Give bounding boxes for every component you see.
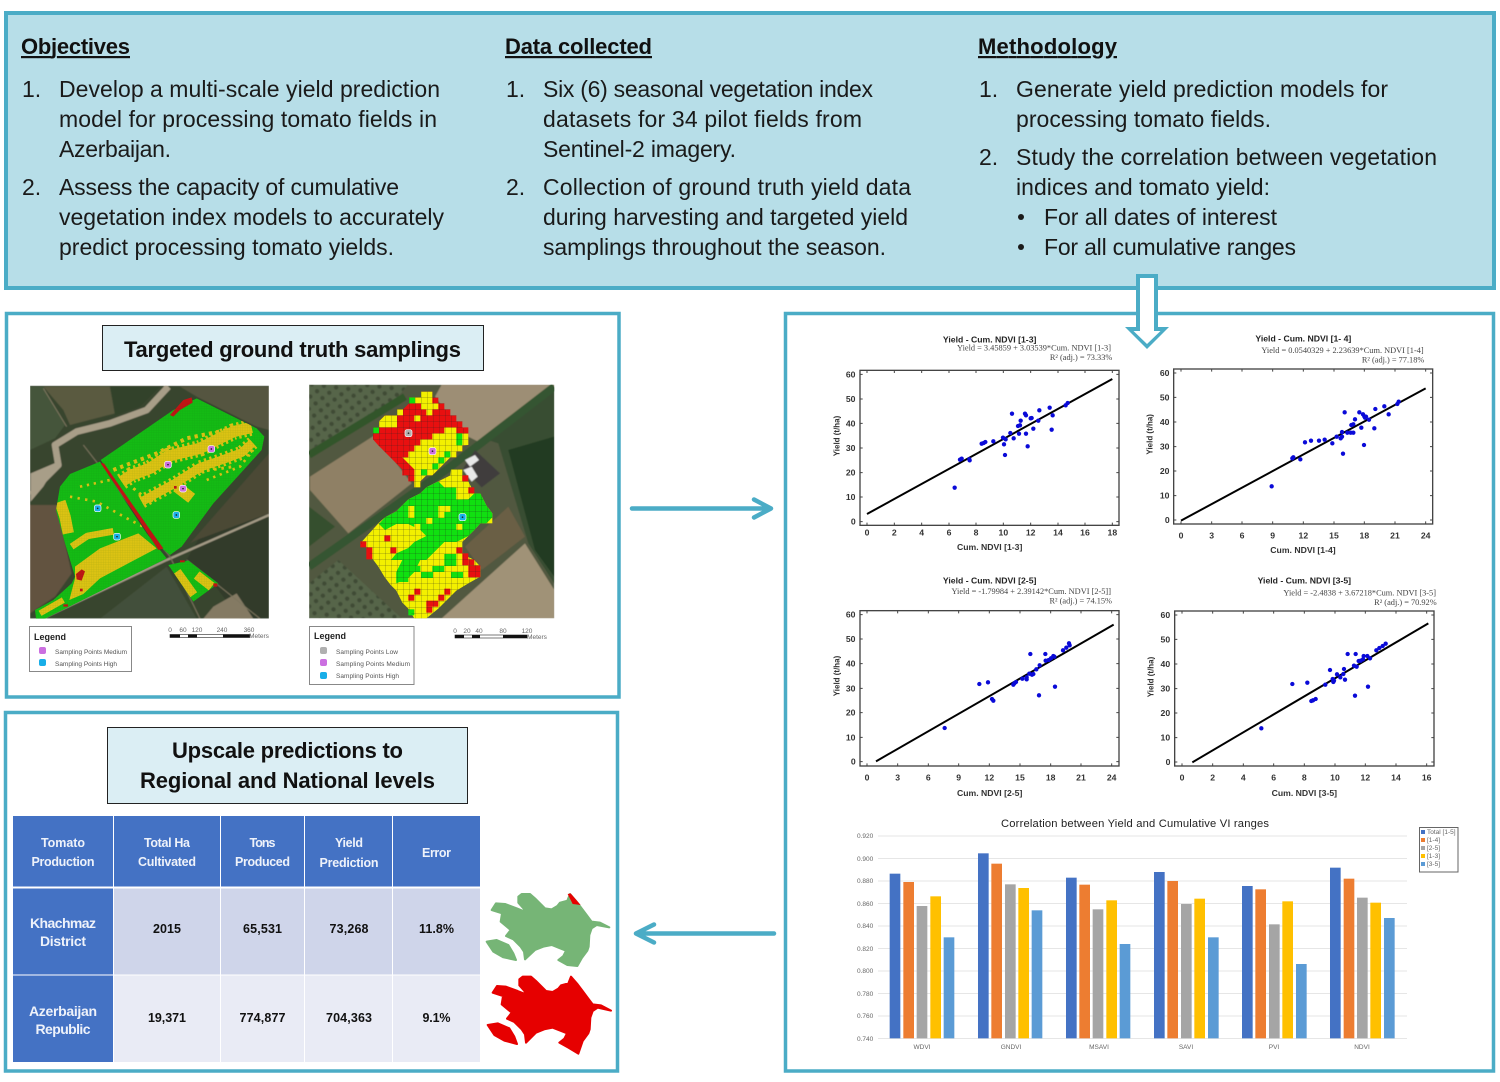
- chart: yield vs cumulative NDVI 2-5: 6: [926, 772, 931, 782]
- lower field cells: [360, 469, 492, 618]
- table: yield predictions: 774,877: [240, 1011, 286, 1025]
- text block: data collected list: Six (6) seasonal vegetation index: [543, 76, 874, 102]
- heading: targeted ground truth samplings: Targeted ground truth samplings: [124, 337, 461, 362]
- chart legend: [1-3]: [1427, 853, 1440, 860]
- chart legend: [3-5]: [1427, 861, 1440, 868]
- chart: yield vs cumulative NDVI 2-5: Yield = -1.79984 + 2.39142*Cum. NDVI [2-5]]: [951, 587, 1111, 596]
- chart: yield vs cumulative NDVI 1-3: Cum. NDVI [1-3]: [957, 542, 1022, 552]
- chart: yield vs cumulative NDVI 1-3: 4: [919, 528, 924, 538]
- chart: yield vs cumulative NDVI 3-5: R² (adj.) = 70.92%: [1374, 598, 1437, 607]
- text block: data collected list: [506, 76, 911, 260]
- chart: correlation between yield and cumulative VI ranges: 0.840: [857, 923, 874, 930]
- chart: yield vs cumulative NDVI 1-3: 20: [846, 468, 856, 478]
- chart: yield vs cumulative NDVI 1-3: 40: [846, 418, 856, 428]
- chart: yield vs cumulative NDVI 1-4: Yield (t/ha): [1146, 414, 1155, 455]
- chart: yield vs cumulative NDVI 3-5: Yield - Cum. NDVI [3-5]: [1258, 575, 1351, 585]
- text block: data collected list: Collection of ground truth yield data: [543, 174, 911, 200]
- small field: [168, 561, 218, 602]
- chart: yield vs cumulative NDVI 1-3: 18: [1108, 528, 1117, 538]
- chart: yield vs cumulative NDVI 1-4: R² (adj.) = 77.18%: [1362, 356, 1424, 365]
- map: pilot fields sampling points: [309, 385, 554, 618]
- scale bar: map 1: 0: [168, 627, 172, 634]
- chart: yield vs cumulative NDVI 3-5: 8: [1302, 772, 1307, 782]
- chart: correlation between yield and cumulative VI ranges: PVI: [1269, 1044, 1279, 1051]
- icon: Azerbaijan map with Khachmaz highlighted: [487, 893, 609, 966]
- panel: targeted ground truth samplings: [6, 314, 619, 697]
- sampling markers: [94, 446, 215, 540]
- chart: correlation between yield and cumulative VI ranges: 0.760: [857, 1013, 874, 1020]
- chart: yield vs cumulative NDVI 3-5: 2: [1210, 772, 1215, 782]
- chart: yield vs cumulative NDVI 1-3: 50: [846, 394, 856, 404]
- table: yield predictions: Tomato: [41, 836, 85, 850]
- text block: objectives list: 2.: [22, 174, 41, 200]
- chart: correlation between yield and cumulative VI ranges: WDVI: [914, 1044, 931, 1051]
- scale bar: map 1: 60: [179, 627, 187, 634]
- bars: SAVI, PVI, NDVI: [1154, 868, 1395, 1038]
- chart: correlation between yield and cumulative VI ranges: 0.740: [857, 1036, 874, 1043]
- table: yield predictions: Yield: [335, 836, 363, 850]
- chart: yield vs cumulative NDVI 2-5: 21: [1076, 772, 1086, 782]
- chart: yield vs cumulative NDVI 2-5: Yield (t/ha): [832, 655, 841, 696]
- text block: methodology list: [979, 76, 1437, 260]
- chart: yield vs cumulative NDVI 1-3: Yield (t/ha): [832, 415, 841, 456]
- scale bar: map 1: 360: [244, 627, 255, 634]
- scale bar: map 1: 120: [192, 627, 203, 634]
- chart: yield vs cumulative NDVI 1-4: 18: [1360, 531, 1369, 541]
- arrow: methodology down to charts: [1125, 274, 1169, 349]
- heading: objectives: Objectives: [21, 34, 130, 59]
- chart: yield vs cumulative NDVI 1-4: Yield = 0.0540329 + 2.23639*Cum. NDVI [1-4]: [1261, 346, 1424, 355]
- table: yield predictions: 19,371: [148, 1011, 186, 1025]
- table: yield predictions: [13, 816, 480, 1062]
- table: yield predictions: Cultivated: [138, 855, 196, 869]
- chart: yield vs cumulative NDVI 3-5: 60: [1161, 610, 1170, 620]
- chart: yield vs cumulative NDVI 2-5: 9: [956, 772, 961, 782]
- chart: yield vs cumulative NDVI 3-5: 6: [1271, 772, 1276, 782]
- chart: yield vs cumulative NDVI 3-5: 12: [1361, 772, 1370, 782]
- chart legend: [1420, 828, 1458, 872]
- chart: yield vs cumulative NDVI 1-3: 8: [974, 528, 979, 538]
- chart: yield vs cumulative NDVI 2-5: 12: [985, 772, 994, 782]
- heading: data collected: Data collected: [505, 34, 652, 59]
- text block: methodology list: Generate yield prediction models for: [1016, 76, 1388, 102]
- chart: correlation between yield and cumulative VI ranges: 0.820: [857, 946, 874, 953]
- heading: upscale predictions: [108, 728, 468, 804]
- chart: yield vs cumulative NDVI 1-4: Yield - Cum. NDVI [1- 4]: [1255, 334, 1351, 344]
- text block: objectives list: predict processing tomato yields.: [59, 234, 394, 260]
- scale bar: map 2: Meters: [527, 634, 548, 641]
- text block: data collected list: datasets for 34 pilot fields from: [543, 106, 862, 132]
- panel: upscale predictions: [6, 712, 618, 1071]
- chart: correlation between yield and cumulative VI ranges: 0.800: [857, 968, 874, 975]
- chart: yield vs cumulative NDVI 1-3: 0: [865, 528, 870, 538]
- heading: targeted ground truth samplings: [102, 326, 484, 370]
- chart: yield vs cumulative NDVI 2-5: 60: [846, 610, 856, 620]
- text block: methodology list: For all dates of interest: [1044, 204, 1278, 230]
- chart: yield vs cumulative NDVI 3-5: Yield (t/ha): [1147, 656, 1156, 697]
- chart: yield vs cumulative NDVI 3-5: 30: [1161, 684, 1170, 694]
- text block: data collected list: samplings throughout the season.: [543, 234, 886, 260]
- chart: yield vs cumulative NDVI 1-4: 10: [1160, 491, 1170, 501]
- chart: yield vs cumulative NDVI 1-3: [832, 335, 1119, 552]
- chart: correlation between yield and cumulative VI ranges: [857, 818, 1458, 1051]
- scale bar: map 1: Meters: [249, 633, 270, 640]
- text block: objectives list: vegetation index models to accurately: [59, 204, 444, 230]
- chart: yield vs cumulative NDVI 1-4: 40: [1160, 417, 1170, 427]
- chart: correlation between yield and cumulative VI ranges: MSAVI: [1089, 1044, 1109, 1051]
- text block: methodology list: For all cumulative ranges: [1044, 234, 1296, 260]
- table: yield predictions: Tons: [250, 836, 276, 850]
- table: yield predictions: Total Ha: [144, 836, 191, 850]
- chart: yield vs cumulative NDVI 3-5: 20: [1161, 708, 1170, 718]
- text block: data collected list: 1.: [506, 76, 525, 102]
- chart legend: [2-5]: [1427, 845, 1440, 852]
- chart: yield vs cumulative NDVI 1-3: 6: [947, 528, 952, 538]
- chart: correlation between yield and cumulative VI ranges: 0.900: [857, 856, 874, 863]
- chart: yield vs cumulative NDVI 1-3: 60: [846, 369, 856, 379]
- chart: yield vs cumulative NDVI 1-3: 12: [1026, 528, 1036, 538]
- chart: yield vs cumulative NDVI 2-5: Yield - Cum. NDVI [2-5]: [943, 575, 1037, 585]
- chart: yield vs cumulative NDVI 1-4: 60: [1160, 368, 1170, 378]
- chart: yield vs cumulative NDVI 2-5: Cum. NDVI [2-5]: [957, 788, 1022, 798]
- lower field: [35, 462, 167, 619]
- chart title: Correlation between Yield and Cumulative VI ranges: [1001, 818, 1269, 830]
- sampling markers: [405, 430, 466, 521]
- icon: Azerbaijan map in red: [488, 977, 611, 1054]
- chart: correlation between yield and cumulative VI ranges: 0.860: [857, 901, 874, 908]
- chart: yield vs cumulative NDVI 3-5: 10: [1161, 733, 1170, 743]
- table: yield predictions: 2015: [153, 922, 181, 936]
- chart: yield vs cumulative NDVI 1-4: 21: [1390, 531, 1400, 541]
- table: yield predictions: District: [40, 933, 86, 949]
- table: yield predictions: Azerbaijan: [29, 1003, 97, 1019]
- table: yield predictions: 11.8%: [419, 922, 454, 936]
- panel: objectives, data collected and methodology: [6, 13, 1494, 288]
- chart: yield vs cumulative NDVI 3-5: 0: [1180, 772, 1185, 782]
- chart: yield vs cumulative NDVI 1-4: 0: [1179, 531, 1184, 541]
- table: yield predictions: Republic: [36, 1021, 91, 1037]
- legend: map 2: Sampling Points High: [336, 673, 399, 680]
- table: yield predictions: Prediction: [320, 856, 378, 870]
- chart: yield vs cumulative NDVI 2-5: 10: [846, 732, 856, 742]
- scale bar: map 1: [168, 627, 270, 640]
- text block: methodology list: Study the correlation between vegetation: [1016, 144, 1437, 170]
- chart: yield vs cumulative NDVI 1-3: Yield - Cum. NDVI [1-3]: [943, 335, 1037, 345]
- chart: yield vs cumulative NDVI 3-5: Cum. NDVI [3-5]: [1272, 788, 1337, 798]
- chart: yield vs cumulative NDVI 2-5: 30: [846, 683, 856, 693]
- chart: correlation between yield and cumulative VI ranges: 0.880: [857, 878, 874, 885]
- legend: map 1: [30, 626, 132, 672]
- legend: map 1: Legend: [34, 632, 66, 642]
- chart: yield vs cumulative NDVI 1-3: 0: [851, 517, 856, 527]
- chart: yield vs cumulative NDVI 1-4: 30: [1160, 442, 1170, 452]
- scale bar: map 2: 20: [463, 628, 471, 635]
- text block: methodology list: 2.: [979, 144, 998, 170]
- table: yield predictions: 9.1%: [422, 1011, 450, 1025]
- yield bands: [40, 427, 253, 613]
- chart: yield vs cumulative NDVI 2-5: 24: [1107, 772, 1117, 782]
- chart: yield vs cumulative NDVI 1-4: Cum. NDVI [1-4]: [1270, 545, 1336, 555]
- table: yield predictions: 65,531: [243, 922, 282, 936]
- chart: yield vs cumulative NDVI 1-4: 20: [1160, 466, 1170, 476]
- map: large field sampling points: [30, 386, 269, 619]
- legend: map 2: Sampling Points Medium: [336, 661, 410, 668]
- legend: map 2: Legend: [314, 631, 346, 641]
- text block: objectives list: Assess the capacity of cumulative: [59, 174, 399, 200]
- chart: yield vs cumulative NDVI 3-5: 10: [1330, 772, 1340, 782]
- chart legend: Total [1-5]: [1427, 829, 1456, 836]
- chart: yield vs cumulative NDVI 1-4: 9: [1270, 531, 1275, 541]
- chart: yield vs cumulative NDVI 2-5: [832, 575, 1119, 798]
- scale bar: map 2: 40: [475, 628, 483, 635]
- chart: yield vs cumulative NDVI 1-4: 12: [1299, 531, 1308, 541]
- chart: yield vs cumulative NDVI 2-5: 40: [846, 659, 856, 669]
- text block: objectives list: Develop a multi-scale yield prediction: [59, 76, 440, 102]
- chart: yield vs cumulative NDVI 3-5: 40: [1161, 659, 1170, 669]
- table: yield predictions: Khachmaz: [30, 915, 96, 931]
- chart: yield vs cumulative NDVI 3-5: Yield = -2.4838 + 3.67218*Cum. NDVI [3-5]: [1283, 589, 1436, 598]
- text block: data collected list: during harvesting and targeted yield: [543, 204, 908, 230]
- chart: yield vs cumulative NDVI 1-3: R² (adj.) = 73.33%: [1050, 353, 1112, 362]
- chart: yield vs cumulative NDVI 3-5: 16: [1422, 772, 1432, 782]
- chart: yield vs cumulative NDVI 2-5: 50: [846, 634, 856, 644]
- table: yield predictions: 704,363: [326, 1011, 372, 1025]
- chart: yield vs cumulative NDVI 1-3: 10: [846, 492, 856, 502]
- chart: yield vs cumulative NDVI 1-4: 6: [1240, 531, 1245, 541]
- upper field cells: [373, 392, 468, 487]
- chart: yield vs cumulative NDVI 1-3: 14: [1053, 528, 1063, 538]
- text block: objectives list: 1.: [22, 76, 41, 102]
- chart: yield vs cumulative NDVI 2-5: R² (adj.) = 74.15%: [1050, 597, 1112, 606]
- chart: yield vs cumulative NDVI 1-4: 50: [1160, 392, 1170, 402]
- text block: data collected list: 2.: [506, 174, 525, 200]
- text block: data collected list: Sentinel-2 imagery.: [543, 136, 736, 162]
- legend: map 1: Sampling Points High: [55, 661, 117, 668]
- chart: yield vs cumulative NDVI 1-4: 3: [1209, 531, 1214, 541]
- chart: yield vs cumulative NDVI 3-5: 0: [1166, 757, 1171, 767]
- text block: methodology list: processing tomato fields.: [1016, 106, 1271, 132]
- scale bar: map 1: 240: [217, 627, 228, 634]
- upper field: [101, 398, 264, 555]
- bars: WDVI, GNDVI, MSAVI: [890, 853, 1130, 1038]
- text block: methodology list: indices and tomato yield:: [1016, 174, 1270, 200]
- chart: correlation between yield and cumulative VI ranges: 0.920: [857, 833, 874, 840]
- chart: yield vs cumulative NDVI 1-3: 16: [1080, 528, 1090, 538]
- text block: methodology list: 1.: [979, 76, 998, 102]
- chart: yield vs cumulative NDVI 2-5: 18: [1046, 772, 1056, 782]
- arrow: samplings to charts: [632, 500, 771, 518]
- chart: yield vs cumulative NDVI 1-3: Yield = 3.45859 + 3.03539*Cum. NDVI [1-3]: [957, 344, 1111, 353]
- text block: objectives list: [22, 76, 444, 260]
- table: yield predictions: Error: [422, 846, 451, 860]
- panel: yield correlation charts: [786, 314, 1494, 1071]
- chart: yield vs cumulative NDVI 1-4: [1146, 334, 1433, 555]
- chart: yield vs cumulative NDVI 2-5: 3: [895, 772, 900, 782]
- legend: map 2: [310, 626, 414, 684]
- scale bar: map 2: 80: [499, 628, 507, 635]
- chart: yield vs cumulative NDVI 1-4: 24: [1421, 531, 1431, 541]
- chart: correlation between yield and cumulative VI ranges: NDVI: [1354, 1044, 1370, 1051]
- chart: yield vs cumulative NDVI 1-3: 30: [846, 443, 856, 453]
- heading: upscale predictions: Regional and National levels: [140, 768, 435, 793]
- chart: yield vs cumulative NDVI 3-5: [1147, 575, 1437, 798]
- cell grid: [373, 392, 468, 487]
- chart: yield vs cumulative NDVI 1-3: 10: [999, 528, 1008, 538]
- chart: yield vs cumulative NDVI 1-3: 2: [892, 528, 897, 538]
- text block: objectives list: Azerbaijan.: [59, 136, 171, 162]
- chart: yield vs cumulative NDVI 3-5: 50: [1161, 634, 1170, 644]
- chart: correlation between yield and cumulative VI ranges: SAVI: [1179, 1044, 1193, 1051]
- chart: yield vs cumulative NDVI 2-5: 20: [846, 708, 856, 718]
- chart: correlation between yield and cumulative VI ranges: GNDVI: [1001, 1044, 1021, 1051]
- chart legend: [1-4]: [1427, 837, 1440, 844]
- scale bar: map 2: 120: [522, 628, 533, 635]
- table: yield predictions: Produced: [235, 855, 290, 869]
- legend: map 2: Sampling Points Low: [336, 649, 398, 656]
- text block: objectives list: model for processing tomato fields in: [59, 106, 437, 132]
- scale bar: map 2: 0: [453, 628, 457, 635]
- table: yield predictions: Production: [32, 855, 94, 869]
- heading: upscale predictions: Upscale predictions to: [172, 738, 403, 763]
- table: yield predictions: 73,268: [330, 922, 369, 936]
- chart: yield vs cumulative NDVI 2-5: 15: [1015, 772, 1025, 782]
- chart: yield vs cumulative NDVI 2-5: 0: [865, 772, 870, 782]
- chart: yield vs cumulative NDVI 1-4: 15: [1329, 531, 1339, 541]
- arrow: charts to upscale predictions: [636, 924, 774, 942]
- scale bar: map 2: [453, 628, 548, 641]
- legend: map 1: Sampling Points Medium: [55, 649, 127, 656]
- chart: yield vs cumulative NDVI 1-4: 0: [1165, 515, 1170, 525]
- chart: yield vs cumulative NDVI 3-5: 4: [1241, 772, 1246, 782]
- heading: methodology: Methodology: [978, 34, 1118, 59]
- chart: yield vs cumulative NDVI 2-5: 0: [851, 757, 856, 767]
- chart: correlation between yield and cumulative VI ranges: 0.780: [857, 991, 874, 998]
- chart: yield vs cumulative NDVI 3-5: 14: [1391, 772, 1401, 782]
